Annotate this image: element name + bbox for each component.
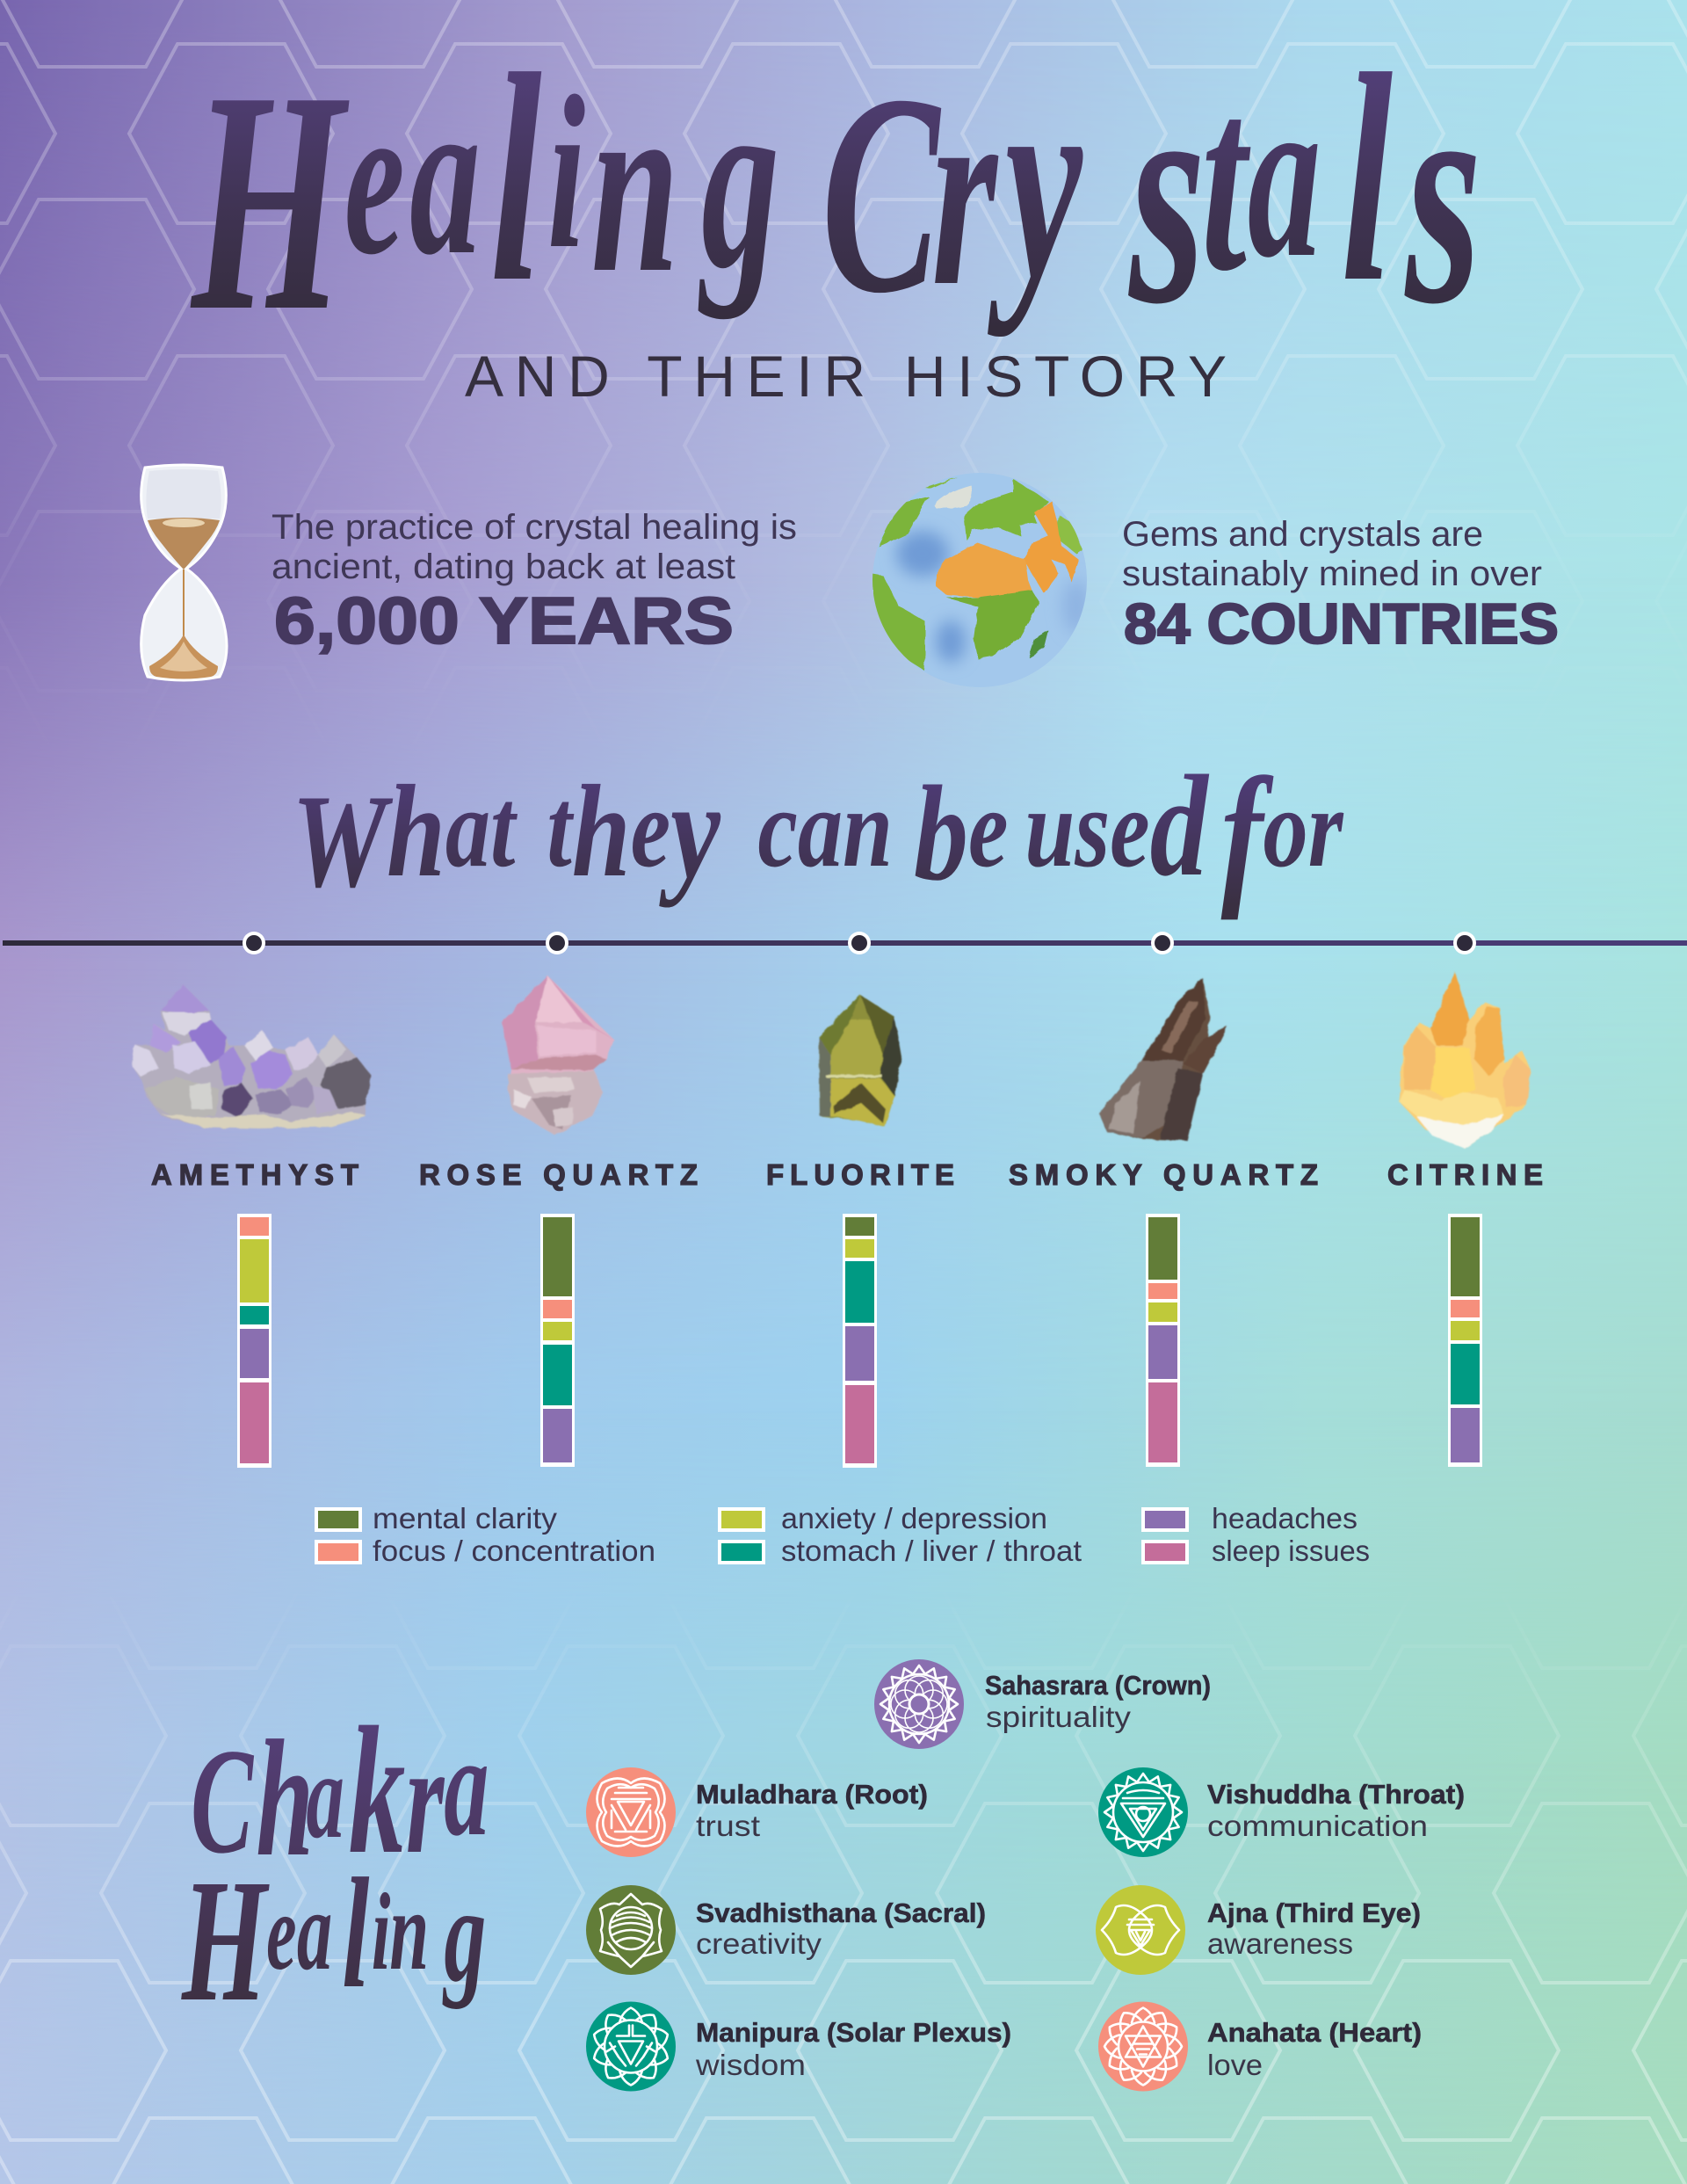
heading: what they can be used for: a bbox=[445, 766, 490, 891]
chakra: throat: communication bbox=[1207, 1810, 1428, 1842]
title: i bbox=[547, 51, 585, 294]
subtitle: AND THEIR HISTORY bbox=[465, 344, 1227, 409]
heading: what they can be used for: h bbox=[572, 758, 631, 904]
heading: what they can be used for: us bbox=[1025, 766, 1110, 891]
chakra: throat: Vishuddha (Throat) bbox=[1207, 1779, 1465, 1810]
title: a bbox=[409, 48, 481, 301]
stacked bar: amethyst bbox=[237, 1214, 272, 1468]
chakra: third eye: Ajna (Third Eye) bbox=[1207, 1897, 1421, 1928]
heading: chakra healing: h bbox=[256, 1707, 314, 1891]
chakra: sacral: Svadhisthana (Sacral) bbox=[696, 1897, 986, 1928]
heading: chakra healing: a bbox=[306, 1728, 344, 1864]
chakra: root bbox=[586, 1767, 928, 1857]
heading: chakra healing: r bbox=[406, 1712, 445, 1887]
title: r bbox=[931, 40, 1000, 342]
stacked bar: rose quartz bbox=[540, 1214, 575, 1467]
text: ancient practice: 6,000 YEARS bbox=[274, 584, 734, 657]
chakra: solar plexus: Manipura (Solar Plexus) bbox=[696, 2017, 1011, 2048]
heading: what they can be used for: o bbox=[1263, 766, 1308, 891]
crystal: rose quartz bbox=[502, 976, 614, 1136]
heading: what they can be used for: r bbox=[1308, 766, 1343, 891]
chakra: crown bbox=[874, 1659, 1211, 1749]
chakra: heart: love bbox=[1207, 2049, 1263, 2081]
text: mined in countries bbox=[1122, 515, 1559, 656]
icon: heart bbox=[1098, 2002, 1188, 2092]
legend: focus / concentration bbox=[373, 1535, 655, 1567]
icon: solar plexus bbox=[586, 2002, 676, 2092]
heading: what they can be used for: b bbox=[914, 758, 968, 909]
heading: chakra healing: e bbox=[266, 1871, 297, 1993]
heading: chakra healing: C bbox=[191, 1716, 254, 1884]
chakra: third eye: awareness bbox=[1207, 1927, 1353, 1960]
stacked bar: fluorite bbox=[843, 1214, 877, 1468]
title: s bbox=[1126, 18, 1206, 369]
legend: anxiety / depression bbox=[781, 1502, 1047, 1535]
chakra: crown: Sahasrara (Crown) bbox=[985, 1670, 1211, 1701]
title: C bbox=[822, 37, 943, 352]
legend bbox=[315, 1502, 1370, 1567]
icon: crown bbox=[874, 1659, 964, 1749]
title: g bbox=[698, 40, 779, 321]
heading: chakra healing: H bbox=[181, 1843, 270, 2037]
heading: chakra healing: l bbox=[342, 1847, 370, 2021]
text: ancient practice bbox=[272, 508, 797, 657]
text: ancient practice: ancient, dating back at least bbox=[272, 548, 735, 586]
heading: what they can be used for: f bbox=[1221, 746, 1274, 921]
heading: what they can be used for: e bbox=[631, 766, 670, 891]
heading: what they can be used for: d bbox=[1150, 746, 1210, 906]
heading: what they can be used for: can bbox=[757, 766, 893, 891]
chakra: heart: Anahata (Heart) bbox=[1207, 2017, 1422, 2048]
crystal: citrine bbox=[1399, 972, 1531, 1149]
crystal: smoky quartz bbox=[1099, 978, 1227, 1141]
title: H bbox=[189, 25, 351, 376]
heading: chakra healing: g bbox=[442, 1859, 486, 2010]
chakra: root: Muladhara (Root) bbox=[696, 1779, 928, 1810]
legend: mental clarity bbox=[373, 1502, 558, 1535]
hexagon pattern top bbox=[0, 0, 1687, 534]
heading: what they can be used for: t bbox=[547, 766, 575, 891]
crystal labels: ROSE QUARTZ bbox=[419, 1158, 698, 1191]
crystal labels: AMETHYST bbox=[151, 1158, 358, 1191]
heading: chakra healing: k bbox=[349, 1690, 405, 1892]
chakra: third eye bbox=[1096, 1885, 1421, 1975]
heading: what they can be used for: e bbox=[968, 766, 1008, 891]
heading: what they can be used for: t bbox=[490, 766, 518, 891]
icon: globe bbox=[872, 473, 1090, 687]
chakra: sacral bbox=[586, 1885, 986, 1975]
heading: what they can be used for: y bbox=[659, 753, 720, 908]
icon: third eye bbox=[1096, 1885, 1185, 1975]
text: mined in countries: Gems and crystals are bbox=[1122, 515, 1483, 554]
legend: sleep issues bbox=[1212, 1535, 1370, 1567]
heading: what they can be used for: W bbox=[292, 766, 394, 915]
crystal labels: FLUORITE bbox=[766, 1158, 954, 1191]
title: y bbox=[986, 25, 1084, 337]
title: l bbox=[1341, 13, 1394, 345]
crystal: fluorite bbox=[819, 995, 901, 1127]
icon: sacral bbox=[586, 1885, 676, 1975]
chakra: heart bbox=[1098, 2002, 1422, 2092]
stacked bar: citrine bbox=[1448, 1214, 1482, 1467]
title: s bbox=[1402, 18, 1481, 369]
heading: what they can be used for: h bbox=[387, 758, 445, 904]
text: ancient practice: The practice of crystal healing is bbox=[272, 508, 797, 547]
chakra: crown: spirituality bbox=[986, 1701, 1132, 1733]
title: t bbox=[1201, 33, 1251, 325]
heading: chakra healing: a bbox=[297, 1868, 332, 1994]
crystal labels bbox=[151, 1158, 1543, 1191]
chakra: root: trust bbox=[696, 1810, 760, 1842]
chakra: sacral: creativity bbox=[696, 1927, 822, 1960]
stacked bar: smoky quartz bbox=[1146, 1214, 1180, 1467]
chakra: solar plexus bbox=[586, 2002, 1011, 2092]
legend: headaches bbox=[1212, 1502, 1358, 1535]
crystal labels: CITRINE bbox=[1387, 1158, 1543, 1191]
legend: stomach / liver / throat bbox=[781, 1535, 1082, 1567]
text: mined in countries: sustainably mined in over bbox=[1122, 555, 1542, 593]
timeline bbox=[3, 932, 1687, 954]
title: n bbox=[591, 44, 679, 326]
icon: hourglass bbox=[141, 465, 227, 680]
crystal: amethyst bbox=[132, 984, 371, 1128]
heading: chakra healing: a bbox=[444, 1705, 489, 1866]
icon: root bbox=[586, 1767, 676, 1857]
title: e bbox=[344, 57, 405, 300]
heading: chakra healing: i bbox=[372, 1871, 390, 1993]
crystal labels: SMOKY QUARTZ bbox=[1009, 1158, 1318, 1191]
title: a bbox=[1248, 44, 1321, 307]
hexagon pattern bottom bbox=[0, 1677, 1687, 2184]
chakra: solar plexus: wisdom bbox=[695, 2049, 806, 2081]
heading: chakra healing bbox=[181, 1690, 489, 2037]
heading: chakra healing: n bbox=[389, 1868, 429, 1994]
chakra: throat bbox=[1098, 1767, 1465, 1857]
icon: throat bbox=[1098, 1767, 1188, 1857]
title: l bbox=[490, 13, 542, 345]
heading: what they can be used for: e bbox=[1110, 766, 1150, 891]
text: mined in countries: 84 COUNTRIES bbox=[1124, 591, 1559, 656]
